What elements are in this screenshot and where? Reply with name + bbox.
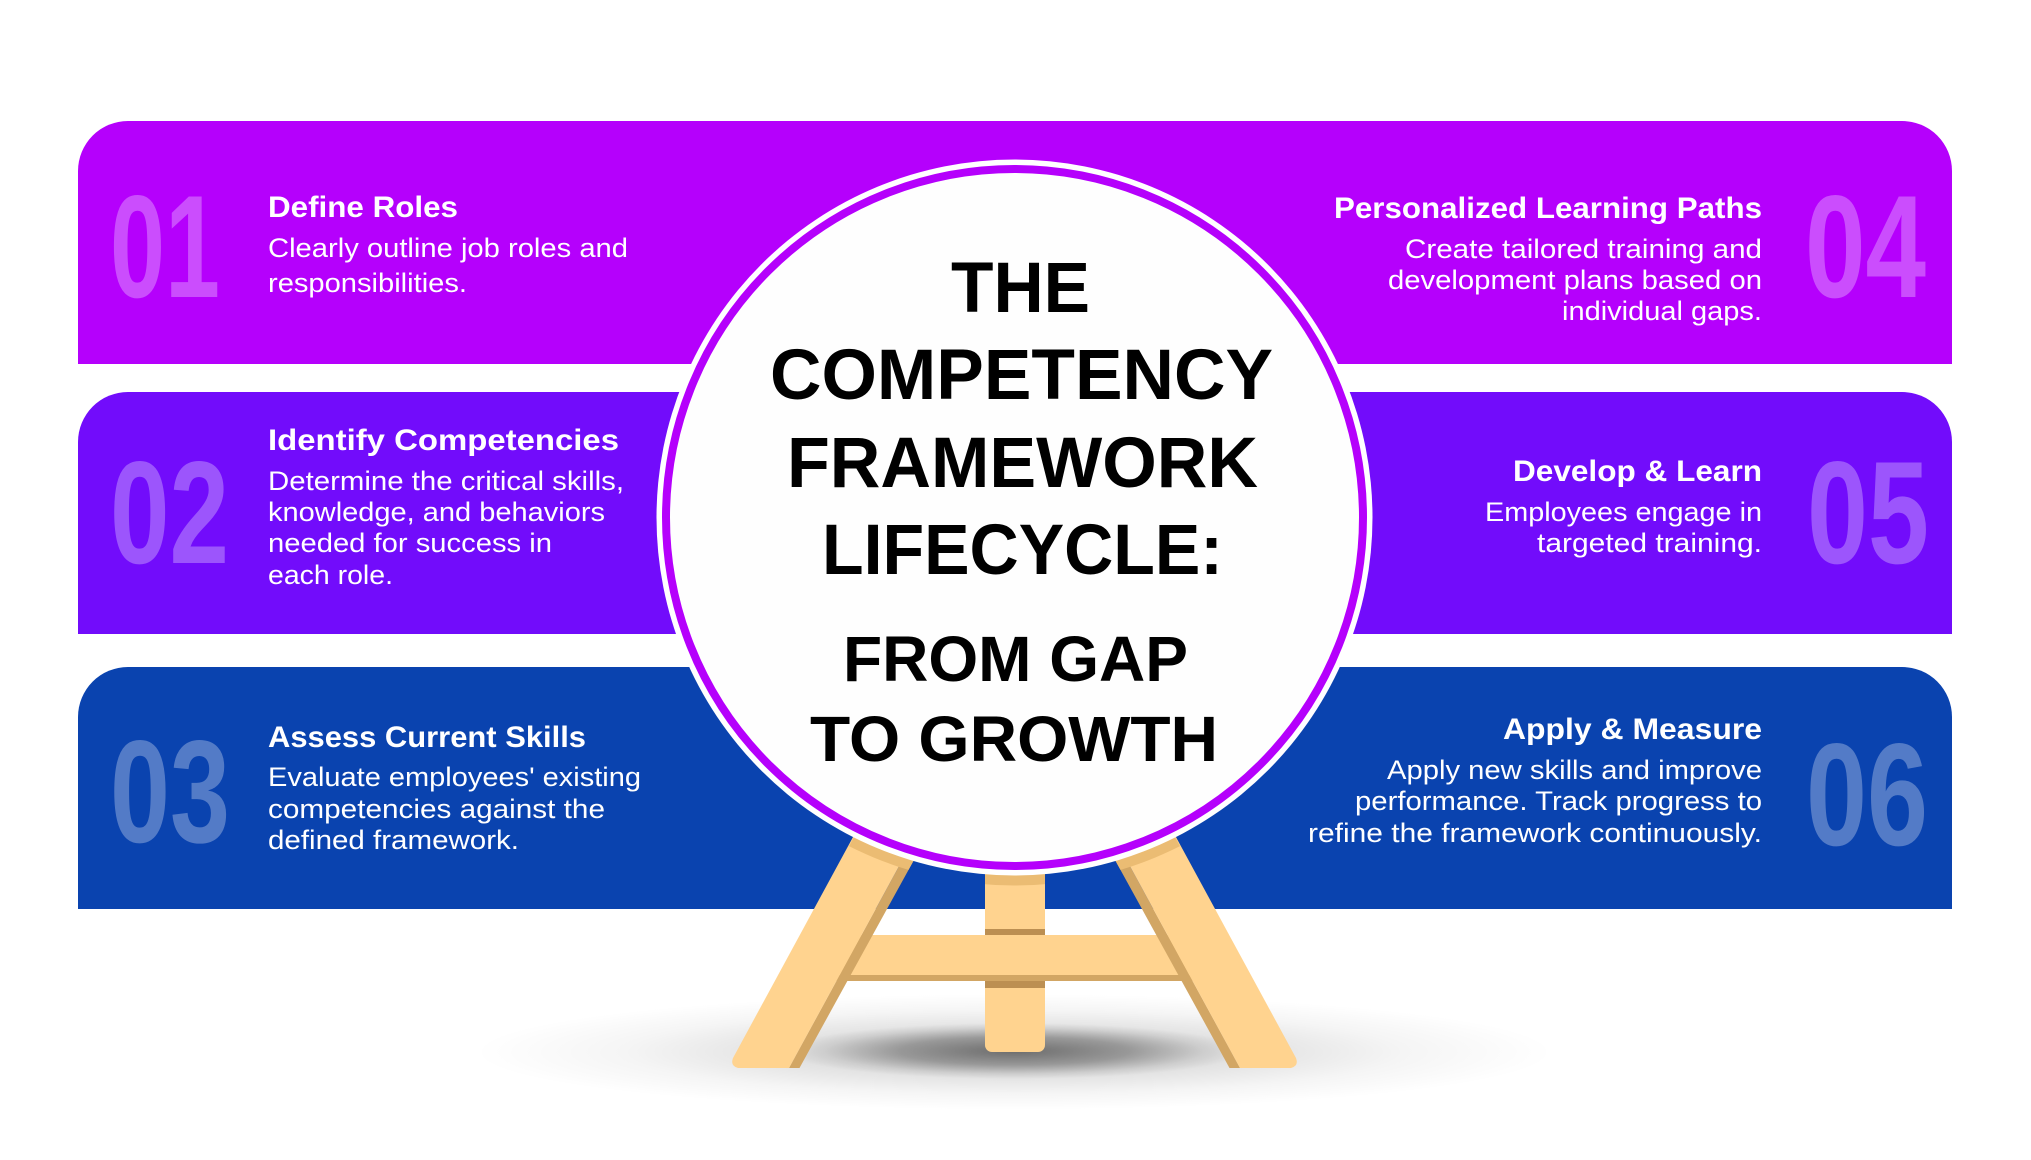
- easel centre post: [985, 800, 1045, 1052]
- heading: Identify Competencies: Identify Competencies: [268, 424, 619, 457]
- panel: 05 Develop and Learn: [1015, 392, 1952, 634]
- number 06: 06: [1806, 713, 1928, 876]
- text: Assess Current Skills description: competencies against the: [268, 794, 605, 824]
- text: Apply and Measure description: refine the framework continuously.: [1308, 818, 1762, 848]
- text: Identify Competencies description: [268, 466, 624, 590]
- text: Identify Competencies description: knowledge, and behaviors: [268, 497, 605, 527]
- title: THE: [951, 249, 1090, 328]
- text: Define Roles description: Clearly outline job roles and: [268, 233, 628, 263]
- text: Develop and Learn description: [1485, 497, 1762, 558]
- subtitle: TO GROWTH: [810, 703, 1218, 775]
- text: Personalized Learning Paths description: individual gaps.: [1562, 296, 1762, 326]
- subtitle: [810, 623, 1218, 775]
- text: Assess Current Skills description: defined framework.: [268, 825, 519, 855]
- heading: Apply and Measure: Apply & Measure: [1503, 713, 1762, 746]
- panel: 02 Identify Competencies: [78, 392, 1015, 634]
- text: Personalized Learning Paths description: development plans based on: [1388, 265, 1762, 295]
- heading: Develop and Learn: Develop & Learn: [1513, 455, 1762, 488]
- title: LIFECYCLE:: [822, 511, 1223, 590]
- text: Apply and Measure description: performance. Track progress to: [1355, 786, 1762, 816]
- ground shadow: [474, 994, 1554, 1110]
- text: Identify Competencies description: Determine the critical skills,: [268, 466, 624, 496]
- number 03: 03: [110, 710, 230, 873]
- text: Identify Competencies description: each role.: [268, 560, 393, 590]
- text: Personalized Learning Paths description: Create tailored training and: [1405, 234, 1762, 264]
- easel stand: [732, 837, 1297, 1068]
- easel crossbar: [830, 935, 1200, 981]
- text: Define Roles description: responsibilities.: [268, 268, 467, 298]
- panel: 04 Personalized Learning Paths: [1015, 121, 1952, 364]
- text: Develop and Learn description: Employees engage in: [1485, 497, 1762, 527]
- easel right leg: [1071, 780, 1297, 1068]
- panel: 03 Assess Current Skills: [78, 667, 1015, 909]
- number 05: 05: [1807, 431, 1929, 594]
- title: COMPETENCY: [770, 336, 1273, 415]
- title: [770, 249, 1273, 590]
- text: Assess Current Skills description: [268, 762, 641, 855]
- subtitle: FROM GAP: [843, 623, 1188, 695]
- text: Apply and Measure description: Apply new skills and improve: [1387, 755, 1762, 785]
- heading: Define Roles: Define Roles: [268, 191, 458, 224]
- central circle sign: [656, 160, 1372, 876]
- number 02: 02: [110, 431, 229, 594]
- heading: Assess Current Skills: Assess Current Skills: [268, 721, 586, 754]
- panel: 06 Apply and Measure: [1015, 667, 1952, 909]
- panel: 01 Define Roles: [78, 121, 1015, 364]
- heading: Personalized Learning Paths: Personalized Learning Paths: [1334, 192, 1762, 225]
- text: Define Roles description: [268, 233, 628, 298]
- text: Personalized Learning Paths description: [1388, 234, 1762, 326]
- number 04: 04: [1805, 165, 1926, 328]
- text: Apply and Measure description: [1308, 755, 1762, 848]
- text: Assess Current Skills description: Evaluate employees' existing: [268, 762, 641, 792]
- number 01: 01: [110, 165, 220, 328]
- text: Develop and Learn description: targeted training.: [1537, 528, 1762, 558]
- title: FRAMEWORK: [787, 424, 1258, 503]
- easel left leg: [732, 780, 958, 1068]
- text: Identify Competencies description: needed for success in: [268, 528, 552, 558]
